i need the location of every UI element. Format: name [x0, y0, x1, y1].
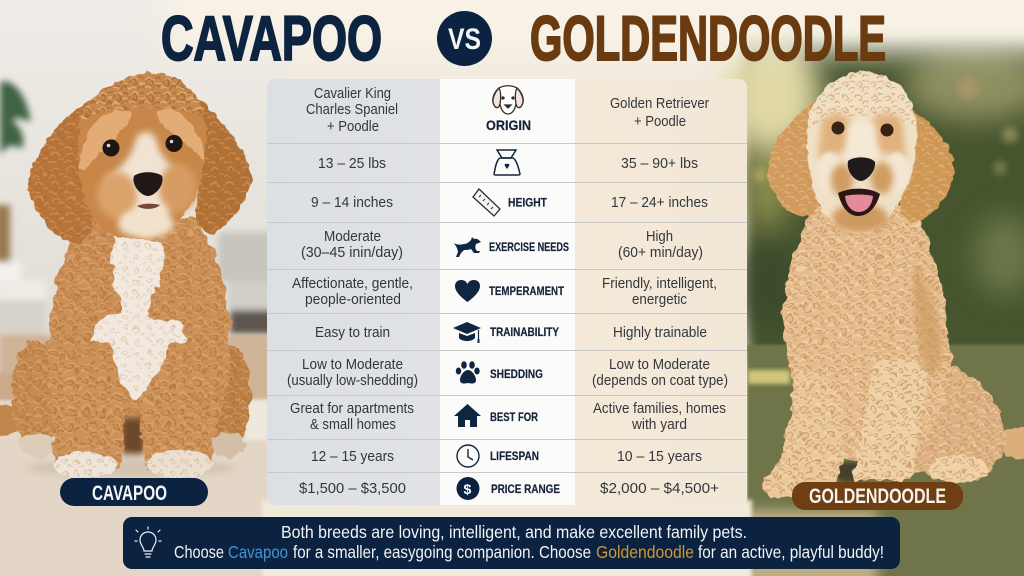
row: trainability: Easy to train — [315, 325, 390, 341]
cavapoo eyes — [102, 135, 182, 156]
row: best for: with yard — [631, 417, 687, 433]
row: temperament: Affectionate, gentle, — [292, 276, 413, 292]
icon: dog face — [493, 86, 523, 114]
row: shedding: (depends on coat type) — [592, 373, 728, 389]
row: weight — [318, 150, 698, 175]
row: shedding: (usually low-shedding) — [287, 373, 418, 389]
goldendoodle mouth and tongue — [838, 189, 880, 216]
row: height: 17 – 24+ inches — [611, 195, 708, 211]
goldendoodle ears — [768, 102, 955, 221]
row: price range: $1,500 – $3,500 — [299, 481, 406, 497]
background: garden scene — [724, 35, 1024, 576]
row: weight: 35 – 90+ lbs — [621, 156, 698, 172]
row: price range — [299, 477, 719, 500]
row: temperament: people-oriented — [305, 292, 401, 308]
label pill: goldendoodle — [792, 482, 963, 510]
cavapoo white chest — [90, 237, 188, 398]
row: weight: 13 – 25 lbs — [318, 156, 386, 172]
goldendoodle flank shading — [913, 260, 942, 375]
title: cavapoo: CAVAPOO — [161, 4, 382, 74]
row: lifespan: 12 – 15 years — [311, 449, 394, 465]
row: exercise needs: Moderate — [324, 229, 381, 245]
callout line 2: Cavapoo — [228, 542, 288, 562]
vs badge — [437, 11, 492, 66]
icon: ruler — [473, 189, 500, 216]
icon: lightbulb — [135, 527, 161, 557]
shadow between legs — [832, 462, 868, 482]
icon: house — [454, 404, 481, 427]
goldendoodle tail — [1000, 427, 1024, 459]
cavapoo front paws — [53, 450, 213, 478]
background: title band — [170, 0, 1024, 52]
row: best for: Active families, homes — [593, 401, 726, 417]
row: height: HEIGHT — [508, 196, 548, 210]
row: origin: Golden Retriever — [610, 96, 709, 112]
shadow between front legs — [122, 418, 144, 454]
goldendoodle front legs — [763, 360, 988, 496]
row: height — [311, 189, 708, 216]
callout line 1: Both breeds are loving, intelligent, and make excellent family pets. — [281, 522, 747, 542]
row: lifespan — [311, 445, 702, 467]
row: best for — [290, 401, 726, 433]
row: temperament: TEMPERAMENT — [489, 284, 565, 298]
cavapoo rear legs — [12, 340, 251, 458]
row: exercise needs: (60+ min/day) — [618, 245, 703, 261]
row: best for: BEST FOR — [490, 410, 538, 424]
callout banner — [123, 517, 900, 569]
icon: clock — [457, 445, 479, 467]
row: origin: + Poodle — [634, 114, 686, 130]
label pill: cavapoo: CAVAPOO — [92, 482, 167, 505]
panel: comparison table — [267, 79, 747, 505]
callout line 2: for a smaller, easygoing companion. Choose — [293, 542, 591, 562]
goldendoodle body — [782, 205, 951, 460]
row: temperament — [292, 276, 717, 308]
icon: paw — [456, 361, 480, 384]
illustration: goldendoodle dog — [763, 71, 1024, 496]
cavapoo body — [47, 215, 230, 450]
vs badge: VS — [448, 23, 481, 56]
cavapoo front legs — [53, 359, 214, 468]
row: origin: Cavalier King — [314, 86, 391, 102]
callout line 2: Goldendoodle — [596, 542, 694, 562]
row: shedding: Low to Moderate — [302, 357, 403, 373]
row: height: 9 – 14 inches — [311, 195, 393, 211]
row: temperament: energetic — [632, 292, 687, 308]
callout line 2 — [174, 542, 884, 562]
row: temperament: Friendly, intelligent, — [602, 276, 717, 292]
cavapoo head — [78, 73, 206, 239]
row: price range: PRICE RANGE — [491, 482, 560, 496]
row: origin — [306, 86, 709, 135]
icon: running dog — [454, 237, 481, 257]
cavapoo mouth — [137, 204, 160, 209]
cavapoo ears — [28, 98, 252, 243]
row: shedding — [287, 357, 728, 389]
goldendoodle head — [807, 71, 917, 234]
table column: labels — [440, 79, 575, 505]
row: origin: + Poodle — [327, 119, 379, 135]
row: exercise needs: EXERCISE NEEDS — [489, 240, 569, 254]
illustration: cavapoo dog — [0, 73, 252, 478]
row: lifespan: 10 – 15 years — [617, 449, 702, 465]
row: exercise needs: High — [646, 229, 673, 245]
cavapoo tail — [0, 404, 20, 436]
label pill: cavapoo — [60, 478, 208, 506]
row: shedding: Low to Moderate — [609, 357, 710, 373]
icon: dollar: $ — [464, 481, 472, 497]
goldendoodle nose — [848, 157, 875, 181]
row: price range: $2,000 – $4,500+ — [600, 481, 719, 497]
label pill: goldendoodle: GOLDENDOODLE — [809, 485, 946, 508]
callout line 2: for an active, playful buddy! — [698, 542, 884, 562]
icon: scale — [494, 150, 520, 175]
goldendoodle eyes — [832, 122, 894, 136]
row: shedding: SHEDDING — [490, 367, 543, 381]
row: best for: Great for apartments — [290, 401, 414, 417]
row: origin: Charles Spaniel — [306, 102, 398, 118]
icon: graduation cap — [453, 322, 481, 343]
row: trainability — [315, 322, 707, 343]
row: trainability: TRAINABILITY — [490, 325, 559, 339]
row: best for: & small homes — [310, 417, 396, 433]
cavapoo chest curls — [90, 237, 188, 398]
carpet shadow — [25, 459, 235, 477]
goldendoodle haunch — [900, 367, 1006, 480]
table column: goldendoodle — [575, 79, 747, 505]
callout line 2: Choose — [174, 542, 224, 562]
row: lifespan: LIFESPAN — [490, 449, 539, 463]
row: exercise needs — [301, 229, 703, 261]
row: exercise needs: (30–45 inin/day) — [301, 245, 403, 261]
icon: dollar — [456, 477, 480, 500]
background: living room scene — [0, 0, 290, 576]
icon: heart — [455, 280, 480, 302]
table column: cavapoo — [267, 79, 440, 505]
row: origin: ORIGIN — [486, 118, 531, 133]
row: trainability: Highly trainable — [613, 325, 707, 341]
background: strip below table — [262, 500, 752, 576]
cavapoo nose — [133, 172, 163, 196]
